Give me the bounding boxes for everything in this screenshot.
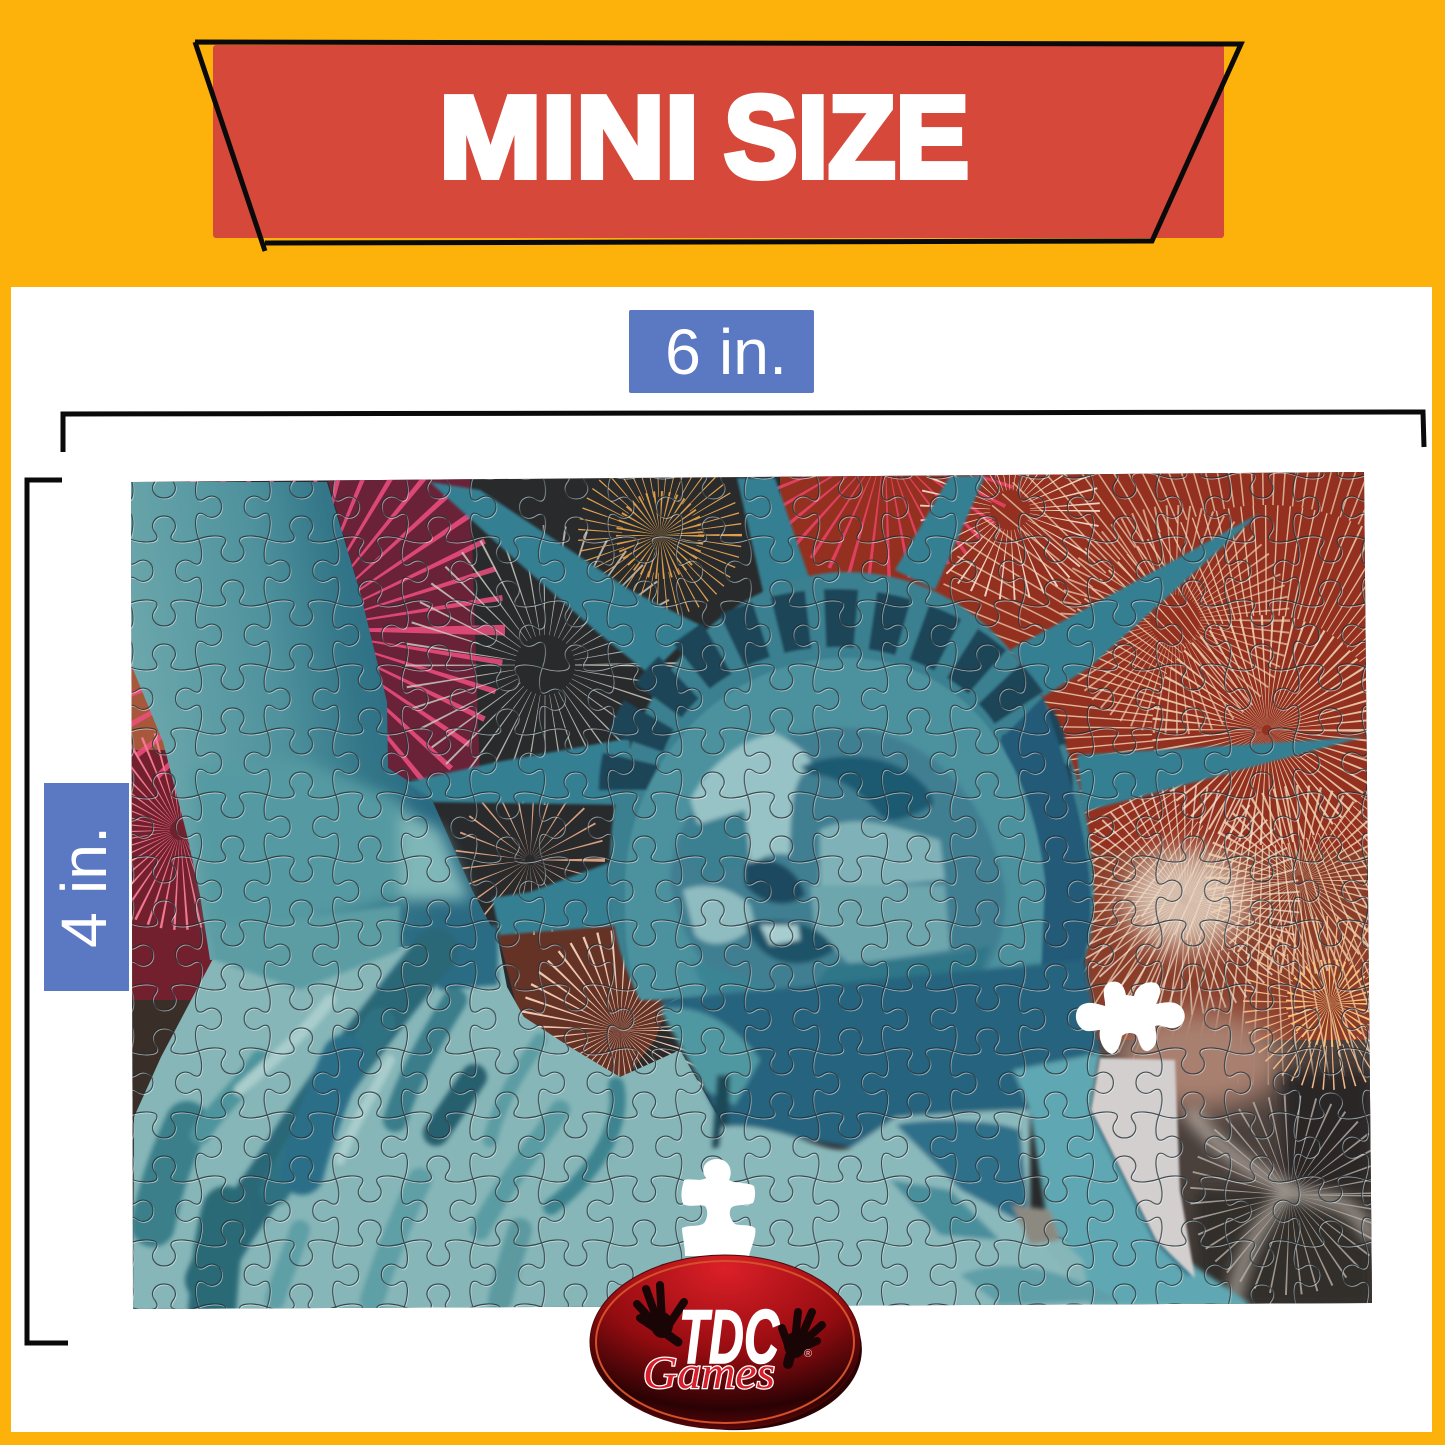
crown spikes — [407, 476, 1364, 935]
missing piece bottom — [681, 1159, 755, 1256]
arm — [130, 482, 498, 960]
width bracket — [63, 412, 1424, 452]
white panel — [11, 287, 1432, 1432]
banner title: SIZE — [724, 72, 969, 202]
logo TDC: TDC — [679, 1295, 780, 1380]
left hand — [637, 1285, 684, 1342]
height bracket — [27, 480, 68, 1343]
registered mark: ® — [804, 1348, 812, 1360]
robe lower — [133, 892, 1250, 1312]
width badge: 6 in.: 6 in. — [665, 316, 787, 388]
right hand — [782, 1312, 822, 1364]
banner title: MINI — [439, 72, 699, 202]
jigsaw piece lines — [130, 470, 1375, 1315]
face — [670, 728, 1006, 995]
neck and chest — [660, 960, 1252, 1310]
banner red rectangle — [213, 45, 1224, 238]
height badge: 4 in.: 4 in. — [48, 826, 120, 948]
missing piece right — [1076, 982, 1185, 1054]
banner — [195, 42, 1241, 251]
height badge: 4 in. — [44, 783, 129, 991]
puzzle photo — [131, 472, 1372, 1309]
robe folds — [153, 905, 618, 1310]
logo oval — [592, 1253, 866, 1437]
pale strip beside hair — [1091, 1058, 1195, 1278]
statue arm and robe — [130, 482, 1250, 1312]
logo Games: Games — [643, 1347, 775, 1398]
crown — [610, 572, 1094, 1005]
banner outline — [195, 42, 1241, 251]
TDC Games logo — [590, 1253, 866, 1437]
width badge: 6 in. — [629, 310, 814, 393]
fireworks background — [131, 472, 1372, 1309]
